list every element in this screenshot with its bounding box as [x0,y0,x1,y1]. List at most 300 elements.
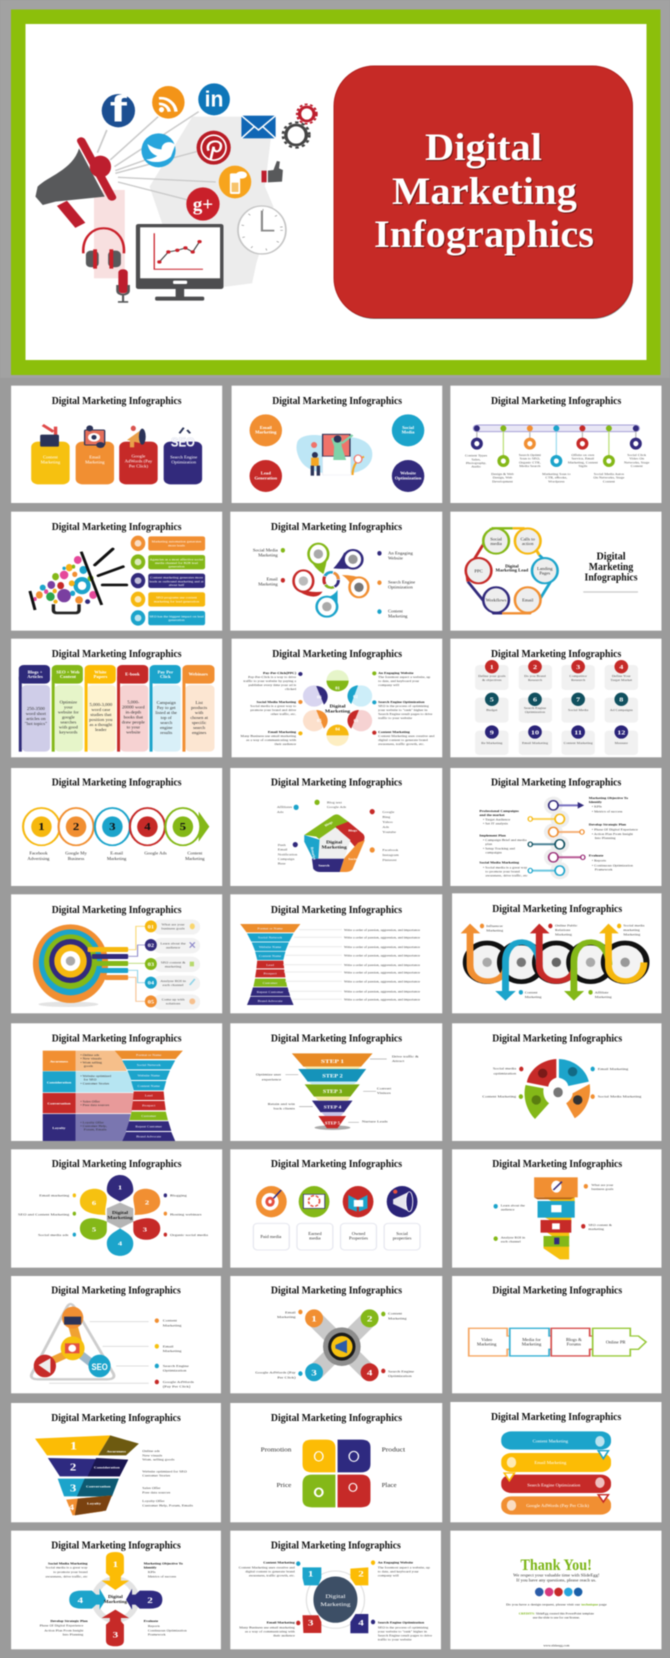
circle: email marketing [250,414,282,446]
right text: Develop Strategic Plan [589,823,626,826]
slide 16: funnel table [11,1023,222,1141]
column: pay per click: Campaign [157,701,177,705]
arrow captions: Social media is a great way [46,1566,88,1570]
right text: Marketing Objective To [589,796,628,800]
circle: website optimization: Optimization [395,476,422,480]
side title [583,550,638,593]
puzzle captions: to date, and keyboard your [378,1570,420,1574]
puzzle captions: Content Marketing uses creative and [239,1566,295,1569]
stage table: • Website optimized [80,1074,111,1078]
pentagon labels: Ads [382,825,390,829]
numbered pills: 04 [148,981,154,986]
slide 28: four arrows around centre [11,1531,221,1649]
left text: • Set IT analysis [483,822,509,826]
ribbon labels: marketing [588,1227,604,1231]
icon: linkedin: in [205,87,223,112]
timeline captions: Media Search [519,464,541,468]
petal chart: 03 [354,719,358,723]
swirl labels: Optimization [388,585,414,590]
triangle labels: Marketing [163,1348,181,1353]
arrow captions: Metrics of success [148,1575,177,1579]
column: pay per click: Click [160,675,171,679]
column: pay per click: search [160,721,173,725]
column: e-book: 20000 word [122,705,146,709]
flower: 2 [145,1198,149,1206]
left text: • Social media is a great way [483,866,528,869]
right text: • Reports [592,859,607,863]
column: seo: Content [60,675,77,679]
pentagon labels: Google [382,810,395,814]
numbered pills: marketing [165,965,181,968]
left text: Implement Plan [479,834,506,837]
slide 10: five linked rings [11,768,222,886]
right text blocks: digital content to generate brand [378,738,428,742]
stage table: • Sales Offer [80,1100,101,1103]
horizontal connector nodes [528,797,585,879]
icon: pinterest [197,131,231,165]
list of five points: Marketing automation generates [152,540,202,544]
column: blogs: word short [26,712,47,716]
timeline bar [473,425,639,457]
column: webinars [182,665,215,752]
right text blocks: to date, and keyboard your [378,679,420,684]
left text blocks: Pay-Per-Click(PPC) [263,671,296,675]
hourglass: Format or Name [257,927,283,931]
concentric rings [33,924,128,1007]
timeline captions [465,453,650,483]
triangle diagram: SEO [91,1362,108,1373]
right text: • Continuous Optimization [592,864,633,867]
left text: • Target Audience [483,818,511,821]
hourglass descriptions: Write a order of passion, aggression, and importance [344,963,420,968]
card: search engine optimization: SEO [171,435,195,450]
number cards: 10 [531,729,539,736]
arrow labels [480,924,645,999]
ring captions: Marketing [185,856,206,861]
right text: Evaluate [589,854,604,858]
arrow labels: Marketing [623,933,640,936]
hourglass funnel: Content Name [138,1084,160,1088]
slide 11: pentagon chart [230,768,442,886]
icon: google plus [186,187,220,221]
numbered pills: 03 [148,963,154,968]
column: webinars: with [195,711,204,715]
pentagon labels: Ads [277,810,284,814]
column: seo: google [62,715,75,719]
swirl labels: An Engaging [388,551,414,555]
linked rings: 2 [73,822,80,833]
column: webinars: engines [192,731,207,735]
text cards: Paid media [260,1235,282,1239]
number cards: 5 [490,696,494,703]
donut labels: Social media [493,1066,516,1071]
number cards: Ad Campaigns [610,708,633,712]
arrow diagram: 4 [78,1596,83,1606]
column: seo: keywords [59,730,78,734]
triangle labels: Google AdWords [163,1379,194,1384]
cross labels: Optimization [388,1373,412,1378]
column: webinars: specific [192,721,207,725]
flower labels [18,1193,208,1237]
arrow boxes: Video [481,1338,492,1342]
column: blogs: articles on [26,717,47,721]
slide 2: four circles around illustration [232,386,442,503]
column: seo: your [64,705,73,709]
number cards: Optimization [525,710,545,714]
slide 18: broken donut [452,1023,661,1141]
left text blocks: Email Marketing [268,730,296,734]
column: seo: searches [60,720,77,724]
pentagon labels: Youtube [382,830,396,834]
triangle labels: Marketing [163,1323,181,1327]
cross labels: Google AdWords (Pay [255,1370,296,1375]
puzzle captions [239,1560,432,1641]
left text blocks: traffic to your website by paying a [243,679,297,683]
slide 29: puzzle around hub: Digital Marketing Infographics [271,1539,401,1551]
column: e-book: E-book [125,672,140,677]
stage table: • Customer Stories [80,1082,110,1085]
hourglass funnel: Brand Advocate [136,1135,162,1139]
linked rings: 4 [144,822,151,833]
right text [589,796,638,871]
donut labels: Social Media Marketing [598,1094,641,1099]
arrow captions: to promote your brand [53,1570,88,1574]
list of five points: SEO has the biggest impact on lead [149,615,204,618]
timeline captions: CTR, eBooks, [545,476,567,480]
hub and puzzle pieces: 4 [358,1618,364,1628]
text cards: Owned [352,1232,366,1236]
slide 20: four circles with cards [230,1149,442,1268]
hexagon ring: media [490,542,502,546]
list of five points: leads as outbound marketing and at [149,580,204,583]
timeline captions: Sous to SEO, [520,457,540,461]
flower labels: Organic social media [170,1233,208,1237]
timeline captions: Sigils [578,464,588,468]
hourglass funnel [115,1051,183,1141]
swirl labels: Website [388,556,403,560]
timeline captions: Offsite on own [571,453,595,457]
arrow captions: Phase Of Digital Experience [40,1624,84,1628]
icon: linkedin [198,83,230,115]
slide 9: twelve numbered cards [450,639,661,757]
icon: microphone [118,269,129,302]
hourglass: Customer [263,981,278,985]
arrow labels: Marketing [555,933,572,936]
arrow captions: Continuous Optimization [148,1629,187,1633]
left text blocks: as a way of communicating with [246,738,296,742]
number cards: Define Your [612,674,632,678]
arrow diagram: Digital [108,1595,124,1599]
linked rings [23,808,209,845]
flower: Marketing [107,1216,133,1221]
timeline captions: Search Optimi [519,453,541,457]
slide 7: six column content types [11,639,222,757]
swirl labels [253,548,415,619]
left text: • Campaign Brief and media [483,838,527,842]
left text: awareness, drive traffic, etc [485,874,528,878]
icon: envelope [241,116,276,138]
column: pay per click: engine [160,726,173,730]
title card: Marketing [392,170,578,213]
number cards: 8 [619,696,624,703]
funnel layers [35,1435,139,1515]
pentagon: Blogs [324,820,334,827]
swirl labels: Marketing [258,582,279,587]
swirl labels: Email [267,577,279,582]
pentagon labels: Google Ads [327,805,347,809]
hourglass descriptions: Write a order of passion, aggression, and importance [344,990,420,994]
petal chart: Marketing [325,710,351,714]
arrow captions: Action Plan From Insight [44,1629,83,1632]
funnel bullet text [142,1449,194,1508]
timeline captions: Development [492,480,513,483]
column: e-book [117,665,148,752]
card: search engine optimization [164,428,202,484]
puzzle captions: The foremost aspect a website, up [378,1566,430,1570]
step labels: Convert [377,1086,392,1090]
column: e-book: 5,000- [127,700,140,705]
stage table: goods [84,1064,94,1068]
left text: campaigns [485,851,503,855]
pentagon labels [277,800,399,866]
number cards: Research [571,678,585,682]
circle: lead generation [250,460,282,492]
slide 7: six column content types: Digital Marketing Infographics [52,647,182,660]
arrow diagram: Marketing [104,1600,128,1604]
stage table: • New visuals [80,1057,102,1061]
cross and hub: 2 [367,1314,372,1324]
swirl labels: Social Media [253,548,278,553]
text cards [253,1223,420,1250]
arrow labels: marketing [623,928,640,932]
number cards: 3 [576,664,581,671]
cross and hub: 1 [311,1314,317,1324]
quadrant tiles [303,1440,370,1507]
column: pay per click: Pay to get [157,706,177,710]
list of five points: Content marketing generates more [150,576,203,580]
arrow boxes [469,1328,646,1356]
slide 12: arrows timeline [450,768,661,886]
step labels: Attract [392,1059,405,1063]
bars: Content Marketing [533,1439,569,1444]
arrow boxes: Forums [567,1342,581,1347]
flower labels: Email marketing [39,1193,69,1198]
arrow captions: Develop Strategic Plan [50,1619,88,1623]
arrow captions: KPIs [148,1570,156,1574]
funnel steps: STEP 5 [325,1121,340,1125]
left text blocks: promote your brand and drive [250,708,297,712]
flower: Digital [112,1211,129,1216]
flower labels: Blogging [170,1193,187,1198]
number cards: Email Marketing [522,741,548,745]
timeline captions: Networks, Stage [624,461,650,465]
donut labels: Email Marketing [598,1067,628,1071]
cross labels: Search Engine [388,1369,414,1373]
timeline captions: Photography, [466,461,486,466]
column: webinars: Webinars [189,672,208,677]
puzzle captions: Search Engine Optimization [378,1621,424,1625]
number cards: 1 [490,664,494,671]
list of five points: media channel for B2B lead [155,561,198,565]
timeline captions: On Networks, Stage [593,476,625,480]
number cards: Research [528,678,542,682]
right text: • Phase Of Digital Experience [592,828,638,831]
pentagon [304,814,365,872]
arrow captions [40,1562,187,1637]
left text blocks: publisher every time your ad is [249,683,297,687]
linked rings: 5 [180,822,186,833]
funnel bullet text: Customer Help, Forum, Emails [142,1504,194,1508]
right text: • Metrics of success [592,810,623,813]
left text: Professional Campaigns [479,809,520,813]
hourglass funnel: Repeat Customer [135,1125,163,1128]
thank you message: If you have any questions, please reach us. [516,1578,596,1583]
bars [501,1431,611,1515]
triangle labels: Optimization [163,1368,186,1373]
slide 21: folded ribbon [452,1149,661,1268]
column: e-book: website [126,730,141,734]
funnel steps: STEP 3 [323,1090,342,1095]
hexagon ring: Social [490,537,503,541]
hourglass funnel: Prospect [142,1104,155,1108]
column: webinars: List [195,701,204,705]
petal chart [303,670,372,746]
funnel bullet text: Sales Offer [142,1486,161,1490]
cross and hub [305,1309,379,1381]
pentagon labels: Campaign [278,857,295,861]
circle: social media: Social [402,426,415,430]
ribbon labels: audience [501,1208,515,1211]
icon: headphones [83,228,124,269]
card: email marketing: Email [89,455,101,459]
slide 25: 3D funnel [11,1403,221,1522]
swirl chart [294,544,368,617]
pentagon labels: Notification [278,853,297,856]
flower labels: Social media ads [38,1233,69,1237]
column: pay per click [150,665,181,752]
arrow captions: Into Planning [63,1633,84,1636]
stage table: • Loyalty Offer [80,1121,105,1124]
number cards: & objectives [482,678,502,682]
triangle labels: Email [163,1344,174,1348]
card: google adwords: Per Click) [129,464,149,469]
numbered pills: business goals [161,927,185,931]
ribbon labels: each channel [501,1240,521,1244]
icon: facebook [102,89,135,130]
icon: facebook: f [110,89,128,130]
column: e-book: books that [124,715,144,719]
slide 20: four circles with cards: Digital Marketing Infographics [271,1157,402,1170]
column: pay per click: Pay Per [157,670,173,674]
hourglass: Brand Advocate [258,999,283,1003]
hexagon ring: Pages [539,571,551,576]
funnel steps [292,1053,373,1130]
slide 4: colourful megaphone list [11,512,222,631]
quadrant labels: Product [382,1447,405,1453]
stage table: Forum, Emails [84,1128,107,1132]
puzzle captions: Email Marketing [267,1621,295,1625]
timeline captions: Content Types [465,454,488,458]
hero illustration: megaphone and social icons [35,83,317,302]
number cards [475,660,638,755]
slide 28: four arrows around centre: Digital Marketing Infographics [51,1539,181,1551]
column: blogs: "hot topics" [25,722,47,726]
triangle diagram [31,1304,114,1379]
arrow diagram [69,1552,162,1646]
column: white papers [85,665,116,752]
right text blocks: An Engaging Website [378,671,414,675]
swirl labels: Marketing [258,553,279,558]
left text: plan [485,842,492,846]
number cards: Search Engine [524,706,547,710]
title card [334,66,633,319]
numbered pills: Analyze ROI in [160,979,186,983]
list of five points: generation [168,618,185,622]
slide 26: four Ps [230,1403,442,1522]
quadrant labels: Place [382,1483,397,1489]
card: content marketing [31,425,70,484]
ribbon labels: business goals [591,1187,614,1191]
arrow labels: Relations [555,928,571,932]
column: e-book: in-depth [126,710,142,714]
arrowheads [461,924,619,1001]
slide 6: hexagon cycle [450,512,661,631]
left text: and the market [479,813,506,817]
triangle labels [49,1318,194,1389]
black rings [466,943,647,982]
cross labels: Per Click) [277,1375,296,1379]
funnel layers: 4 [69,1503,74,1513]
numbered pills: Learn about the [160,942,186,945]
arrow labels: Marketing [525,995,542,999]
puzzle captions: their audience [273,1634,295,1637]
column: pay per click: results [160,731,173,735]
stage table: Loyalty [52,1126,66,1130]
cross labels: Marketing [388,1316,407,1320]
pentagon: Social [348,857,358,861]
hourglass: Lead [266,963,274,967]
slide 29: puzzle around hub [230,1531,441,1649]
hourglass descriptions: Write a order of passion, aggression, and importance [344,998,420,1002]
ring captions [27,851,206,861]
closing notes: www.slideegg.com [543,1644,570,1647]
step labels: Visitors [377,1090,391,1095]
circle: social media: Media [402,430,415,435]
number cards: 7 [576,696,581,703]
text cards: Earned [308,1232,323,1236]
arrow captions: Identify [144,1566,157,1569]
hourglass descriptions: Write a order of passion, aggression, and importance [344,928,420,933]
icon: monitor chart [136,224,223,301]
text cards: Properties [349,1236,368,1241]
right text: Framework [595,868,613,871]
arrow boxes: Marketing [477,1342,497,1347]
column: seo: Optimize [60,700,77,704]
funnel steps: STEP 1 [321,1059,344,1065]
card: search engine optimization: Optimization [171,460,197,464]
slide 14: hourglass list: Digital Marketing Infographics [271,903,402,916]
triangle labels: Content [163,1318,178,1323]
ribbon labels: SEO content & [588,1223,612,1227]
number cards: Social Media [568,708,589,712]
timeline captions: Design & Web [491,472,514,476]
hexagon ring: Digital [505,564,520,568]
list of five points: more leads [168,544,186,547]
numbered pills: each channel [163,983,184,987]
hourglass: Content Name [259,954,282,958]
ribbon [534,1177,578,1259]
hub and puzzle pieces: 1 [308,1569,313,1579]
